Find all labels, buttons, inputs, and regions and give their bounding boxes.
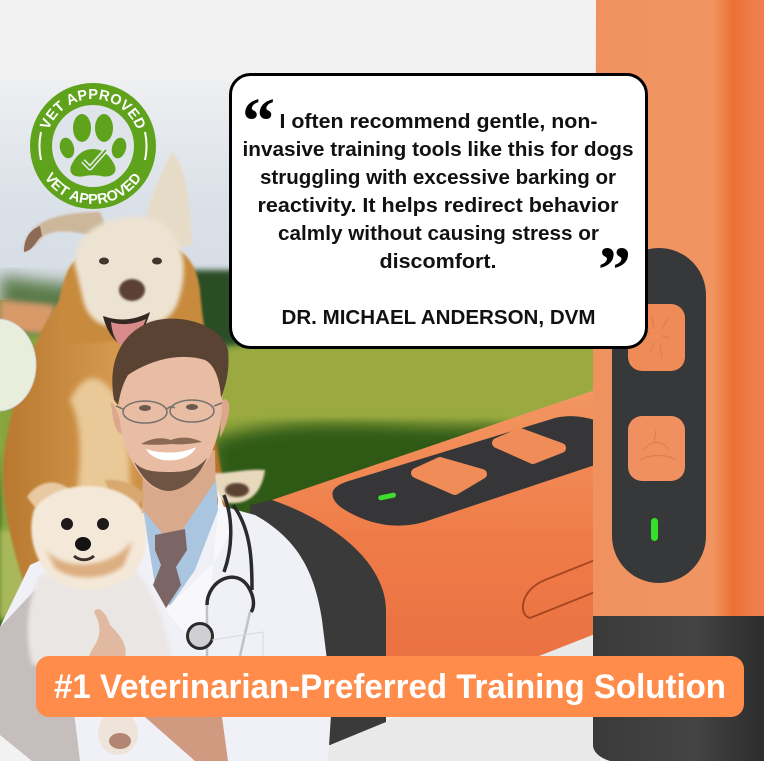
- mouth: [74, 556, 94, 560]
- eyes: [99, 258, 162, 264]
- blue shirt: [143, 480, 218, 606]
- control panel: [332, 416, 595, 526]
- quote text: calmly without causing stress or: [278, 223, 599, 245]
- icon: paw: [58, 114, 128, 177]
- chest piece: [188, 624, 212, 648]
- lower paw: [98, 711, 138, 755]
- hand: [89, 609, 126, 660]
- left ear: [24, 212, 112, 252]
- quote text: invasive training tools like this for dogs: [242, 139, 634, 161]
- mouth and tongue: [103, 312, 150, 346]
- ears: [111, 399, 229, 438]
- body: [3, 300, 230, 600]
- quote text: I often recommend gentle, non-: [280, 111, 598, 133]
- head: [31, 486, 146, 590]
- front paw: [205, 470, 265, 503]
- orange body: [272, 390, 595, 716]
- beard: [134, 458, 207, 491]
- upright ear: [145, 152, 192, 250]
- quote text: struggling with excessive barking or: [260, 167, 616, 189]
- hair: [112, 319, 229, 405]
- button: [628, 304, 685, 371]
- orange body: [593, 0, 764, 620]
- moustache: [141, 438, 202, 445]
- slide switch: [523, 560, 595, 618]
- badge: vet approved: [30, 83, 156, 209]
- eyes: [61, 518, 73, 530]
- badge curved text: VET APPROVED: [39, 89, 145, 128]
- button: [416, 462, 482, 490]
- quote text: [242, 111, 634, 273]
- indicator light: [378, 492, 396, 501]
- nose: [119, 279, 145, 301]
- quote card: [230, 74, 646, 348]
- quote text: reactivity. It helps redirect behavior: [258, 195, 619, 217]
- dark end cap: [250, 500, 386, 745]
- small white dog: [27, 480, 172, 755]
- white coat: [0, 505, 332, 761]
- coat lapel: [165, 490, 232, 655]
- stethoscope: [207, 495, 254, 612]
- control panel: [612, 248, 706, 583]
- badge ring lines: [40, 132, 146, 160]
- button marks: [640, 316, 676, 460]
- ears: [27, 483, 70, 520]
- tie: [153, 529, 187, 608]
- coat pocket: [212, 632, 263, 656]
- big golden dog: [3, 152, 265, 600]
- forearm: [145, 717, 228, 761]
- product: upright trainer: [593, 0, 764, 761]
- button: [628, 416, 685, 481]
- body: [28, 565, 172, 665]
- floor behind products: [300, 630, 600, 761]
- banner: [36, 656, 744, 717]
- icon: check mark: [83, 150, 106, 168]
- veterinarian: [0, 319, 332, 761]
- background photo: sky and field: [0, 80, 600, 630]
- nose: [75, 537, 91, 551]
- opening quotation mark: “: [242, 85, 275, 158]
- banner: #1 Veterinarian-Preferred Training Solution: [54, 668, 726, 706]
- badge: vet approved: VET APPROVED: [46, 172, 140, 204]
- smile: [146, 447, 196, 460]
- closing quotation mark: ”: [598, 234, 631, 307]
- sleeve in shade: [0, 590, 80, 761]
- quote text: discomfort.: [380, 251, 496, 273]
- head centre: [74, 217, 184, 327]
- black base: [593, 616, 764, 761]
- face: [119, 356, 222, 490]
- eyes: [139, 404, 198, 411]
- pale circle at left edge: [0, 319, 36, 411]
- neck: [142, 450, 216, 545]
- head sides: [58, 240, 205, 345]
- glasses: [116, 400, 222, 423]
- attribution: DR. MICHAEL ANDERSON, DVM: [282, 307, 596, 329]
- indicator light: [651, 518, 658, 541]
- button: [497, 433, 561, 459]
- product: horizontal trainer: [250, 390, 595, 745]
